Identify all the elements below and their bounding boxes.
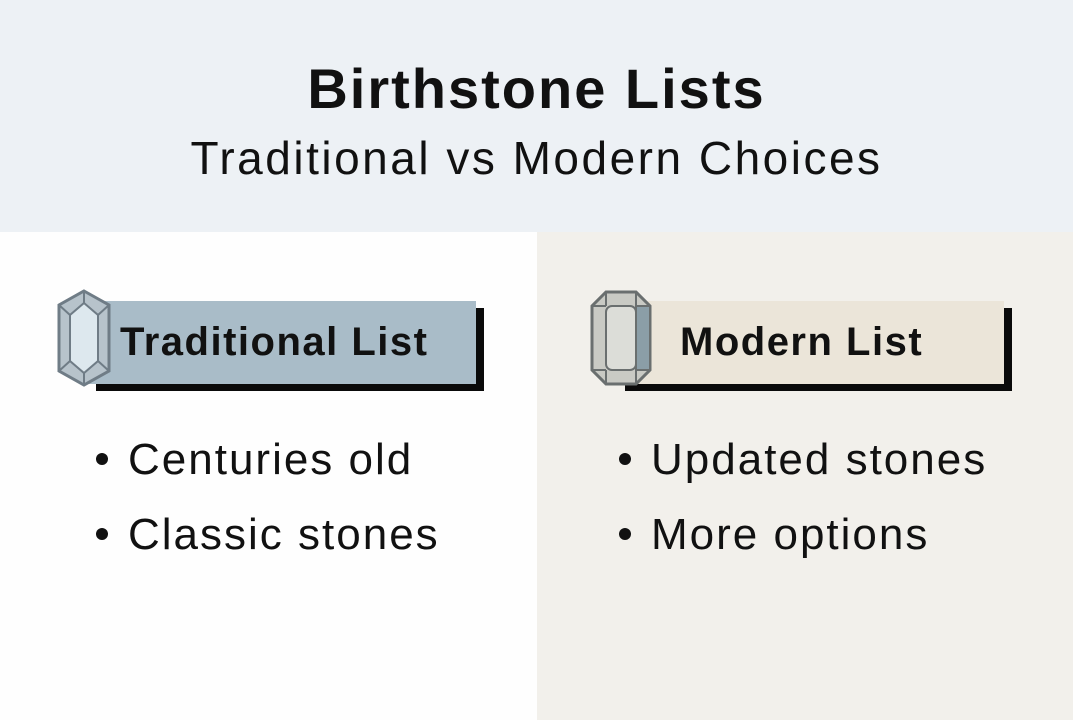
icon: traditional gem — [58, 289, 110, 387]
traditional header box: Traditional List — [120, 320, 428, 364]
traditional header box — [88, 301, 476, 384]
modern header box: Modern List — [680, 320, 923, 364]
bullet list: traditional: Centuries old — [128, 435, 413, 484]
modern header box — [617, 301, 1004, 384]
bullet list: traditional — [96, 435, 440, 559]
panel: traditional — [0, 232, 537, 720]
panel: modern — [537, 232, 1073, 720]
bullet list: modern: Updated stones — [651, 435, 987, 484]
icon: modern gem — [590, 290, 652, 386]
bullet list: modern — [619, 435, 987, 559]
title: Birthstone Lists — [307, 57, 766, 120]
subtitle: Traditional vs Modern Choices — [190, 132, 883, 184]
bullet list: traditional: Classic stones — [128, 510, 440, 559]
bullet list: modern: More options — [651, 510, 929, 559]
header band — [0, 0, 1073, 232]
